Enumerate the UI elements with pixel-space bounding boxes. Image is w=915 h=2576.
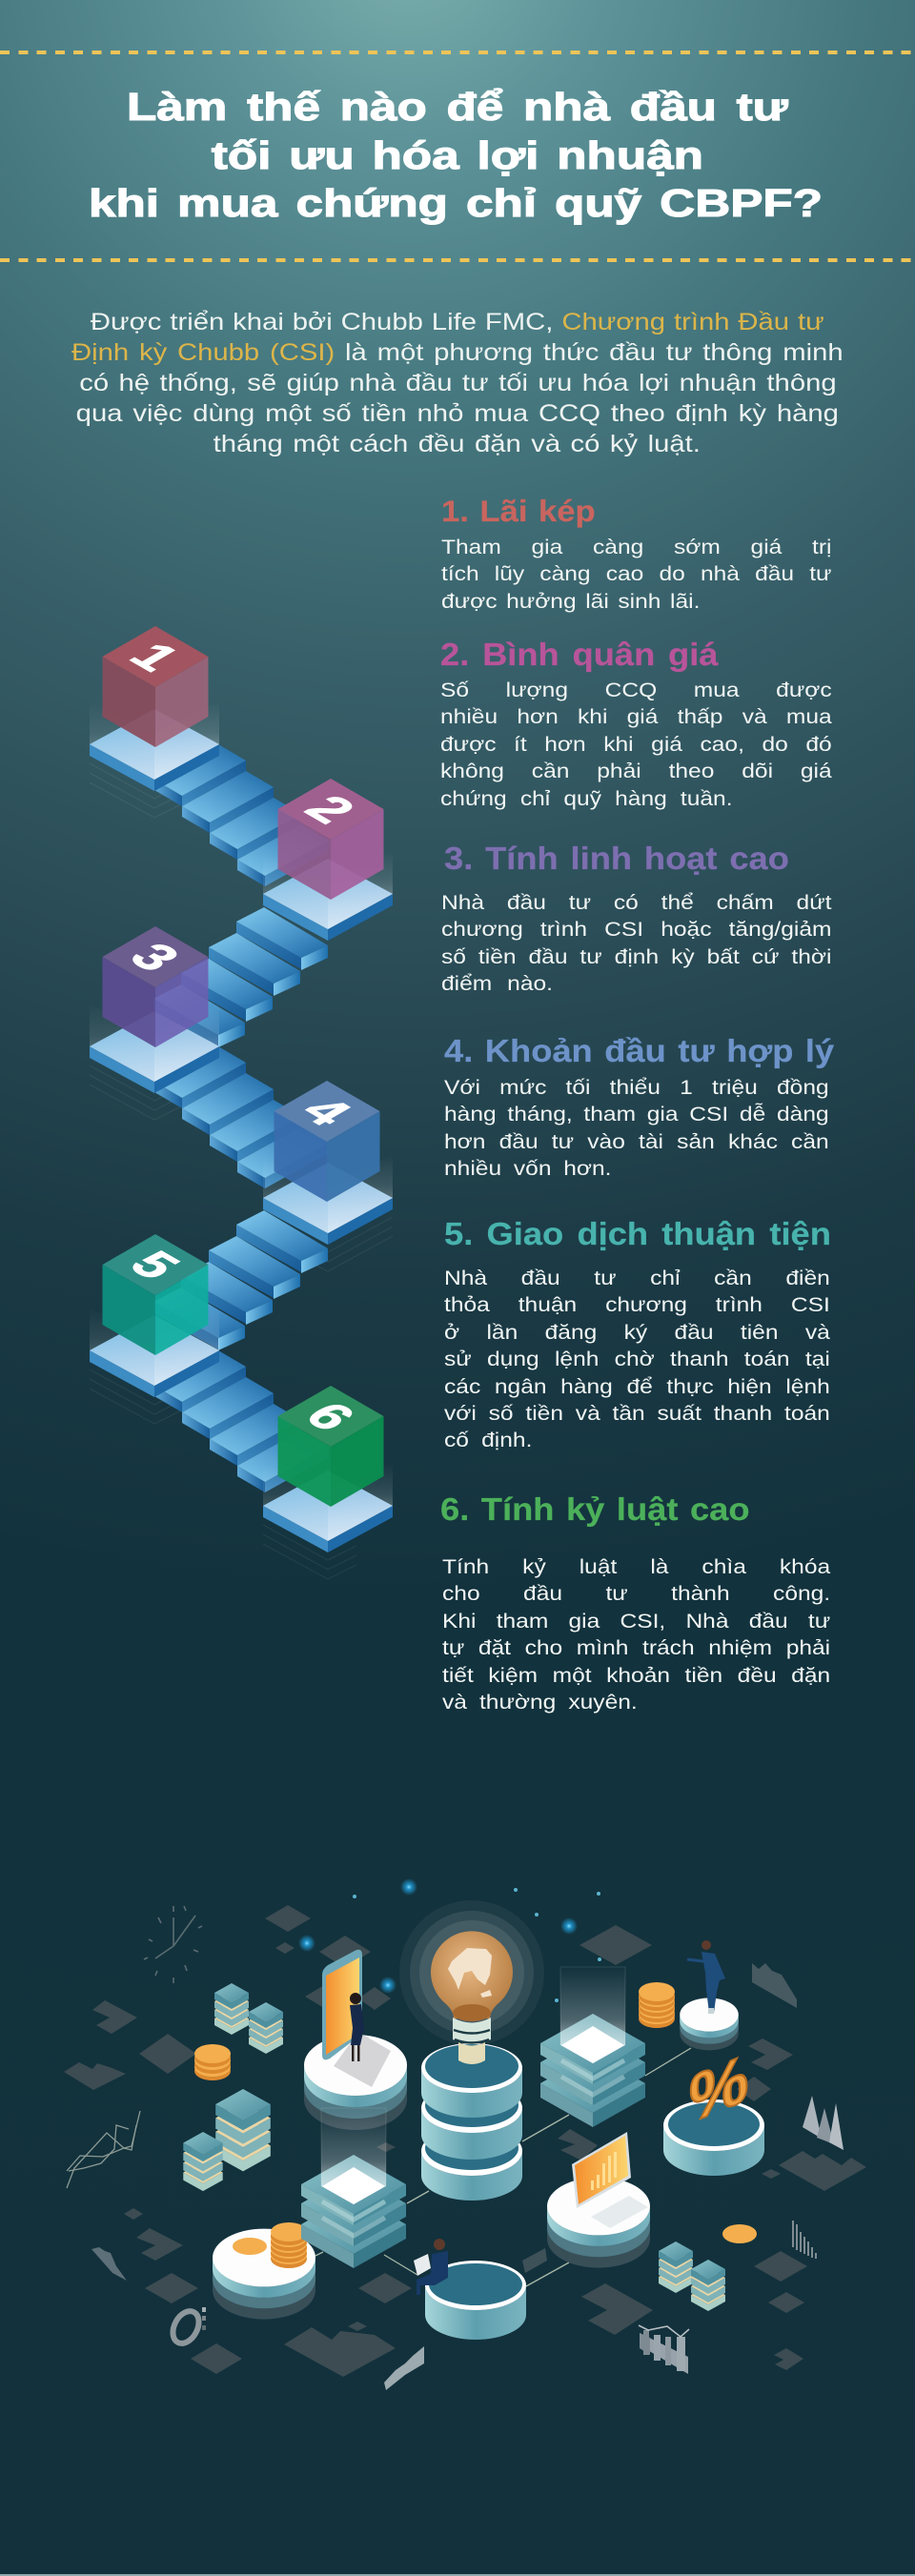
figure: standing man	[687, 1940, 725, 2014]
icon: white area chart	[384, 2346, 424, 2390]
intro paragraph: tháng một cách đều đặn và có kỷ luật.	[214, 431, 701, 457]
heading 4: 4. Khoản đầu tư hợp lý	[444, 1033, 834, 1068]
top dashed divider	[0, 51, 915, 54]
text block 3: số tiền đầu tư định kỳ bất cứ thời	[441, 946, 831, 968]
heading 1: 1. Lãi kép	[441, 494, 596, 528]
text block 2: không cần phải theo dõi giá	[440, 761, 832, 782]
cube 6: 6	[293, 1395, 367, 1438]
text block 5: thỏa thuận chương trình CSI	[444, 1294, 830, 1316]
illustration: small servers	[214, 1983, 283, 2054]
text block 5: cố định.	[444, 1430, 532, 1451]
illustration: background diamond tiles	[64, 1905, 866, 2377]
illustration: monitor pedestal	[547, 2132, 650, 2268]
figure: woman	[350, 1993, 364, 2061]
flight 4 to 5	[153, 1210, 328, 1350]
text block 5: ở lần đăng ký đầu tiên và	[444, 1322, 830, 1344]
cube 3: 3	[117, 936, 192, 979]
cube 4	[274, 1081, 379, 1202]
flight 1 to 2	[154, 744, 329, 886]
text block 2	[440, 679, 832, 810]
cube 1: 1	[117, 636, 192, 679]
illustration: coin stack right	[639, 1982, 675, 2028]
text block 5	[444, 1268, 830, 1451]
icon: spike chart	[92, 2247, 127, 2281]
text block 1: Tham gia càng sớm giá trị	[441, 537, 831, 558]
flight 3 to 4	[154, 1046, 329, 1188]
text block 1	[441, 537, 831, 613]
text block 5: Nhà đầu tư chỉ cần điền	[444, 1268, 830, 1289]
icon: glowing stars	[298, 1878, 601, 2002]
title: khi mua chứng chỉ quỹ CBPF?	[89, 181, 823, 225]
text block 2: nhiều hơn khi giá thấp và mua	[440, 706, 832, 728]
text block 4: hơn đầu tư vào tài sản khác cần	[444, 1131, 829, 1153]
illustration: coin single	[722, 2224, 757, 2243]
plates	[90, 701, 393, 1552]
text block 6: và thường xuyên.	[442, 1692, 638, 1714]
intro paragraph: qua việc dùng một số tiền nhỏ mua CCQ theo định kỳ hàng	[76, 400, 839, 427]
heading 3: 3. Tính linh hoạt cao	[444, 841, 789, 876]
title: Làm thế nào để nhà đầu tư	[127, 85, 788, 129]
text block 3: điểm nào.	[441, 973, 553, 995]
icon: line chart	[67, 2111, 140, 2188]
illustration: bottom right servers	[659, 2241, 725, 2311]
cube 2	[278, 779, 383, 900]
text block 6	[442, 1556, 831, 1714]
text block 2: được ít hơn khi giá cao, do đó	[440, 734, 832, 756]
figure: seated man	[414, 2239, 448, 2295]
cube 1	[103, 626, 208, 747]
cube 6	[278, 1386, 383, 1507]
heading 6: 6. Tính kỷ luật cao	[440, 1491, 749, 1527]
icon: grey mountain chart	[752, 1963, 797, 2008]
text block 6: Tính kỷ luật là chìa khóa	[442, 1556, 830, 1578]
icon: clock	[144, 1906, 202, 1983]
icon: smartphone	[322, 1950, 362, 2059]
text block 5: các ngân hàng để thực hiện lệnh	[444, 1376, 830, 1398]
icon: percent sign: %	[689, 2039, 748, 2138]
cube 2: 2	[293, 788, 367, 831]
text block 3	[441, 892, 831, 995]
cube 3	[103, 926, 208, 1047]
icon: monitor with chart	[572, 2132, 648, 2228]
illustration: coin stack left	[194, 2044, 231, 2080]
cube 5: 5	[117, 1244, 192, 1287]
bottom edge strip	[0, 2574, 915, 2576]
illustration: man with laptop on cylinder	[414, 2239, 526, 2340]
text block 6: tiết kiệm một khoản tiền đều đặn	[442, 1665, 830, 1687]
illustration: right data layers	[540, 1967, 645, 2127]
intro paragraph: Định kỳ Chubb (CSI) là một phương thức đầu tư thông minh	[71, 339, 844, 366]
flight 5 to 6	[154, 1350, 329, 1492]
illustration: left data layers	[301, 2108, 406, 2268]
flight 2 to 3	[153, 907, 328, 1047]
intro paragraph: Được triển khai bởi Chubb Life FMC, Chương trình Đầu tư	[91, 309, 824, 335]
text block 2: Số lượng CCQ mua được	[440, 679, 832, 701]
text block 2: chứng chỉ quỹ hàng tuần.	[440, 788, 733, 810]
text block 1: được hưởng lãi sinh lãi.	[441, 591, 700, 613]
intro paragraph: có hệ thống, sẽ giúp nhà đầu tư tối ưu hóa lợi nhuận thông	[79, 370, 837, 396]
text block 4: hàng tháng, tham gia CSI dễ dàng	[444, 1104, 829, 1126]
icon: light bulb globe	[399, 1900, 544, 2064]
icon: hatch chart	[522, 2248, 547, 2273]
text block 3: Nhà đầu tư có thể chấm dứt	[441, 892, 831, 914]
intro paragraph	[71, 309, 844, 457]
text block 4	[444, 1077, 829, 1180]
icon: bar chart with trend line	[639, 2325, 689, 2374]
text block 6: Khi tham gia CSI, Nhà đầu tư	[442, 1611, 830, 1633]
title: tối ưu hóa lợi nhuận	[212, 133, 703, 177]
staircase	[90, 701, 393, 1552]
text block 1: tích lũy càng cao do nhà đầu tư	[441, 563, 831, 585]
icon: donut chart	[168, 2306, 206, 2348]
cube 5	[103, 1234, 208, 1355]
title	[89, 85, 823, 225]
icon: small bars	[792, 2221, 817, 2259]
text block 6: tự đặt cho mình trách nhiệm phải	[442, 1637, 830, 1659]
illustration: database cylinders with bulb	[399, 1900, 544, 2201]
icon: triangles chart	[803, 2096, 844, 2150]
illustration: phone pedestal	[304, 1950, 407, 2130]
heading 5: 5. Giao dịch thuận tiện	[444, 1216, 831, 1251]
illustration: large servers	[183, 2089, 271, 2191]
text block 5: với số tiền và tần suất thanh toán	[444, 1403, 830, 1425]
illustration: coin pedestal	[213, 2222, 315, 2320]
text block 6: cho đầu tư thành công.	[442, 1583, 830, 1605]
text block 5: sử dụng lệnh chờ thanh toán tại	[444, 1349, 830, 1370]
bottom title dashed divider	[0, 258, 915, 262]
text block 4: Với mức tối thiểu 1 triệu đồng	[444, 1077, 829, 1099]
illustration: percent pedestal	[663, 2039, 764, 2176]
illustration: connector lines	[315, 2048, 691, 2286]
heading 2: 2. Bình quân giá	[440, 637, 719, 672]
cube 4: 4	[289, 1090, 363, 1133]
text block 3: chương trình CSI hoặc tăng/giảm	[441, 919, 831, 941]
text block 4: nhiều vốn hơn.	[444, 1158, 612, 1180]
illustration: man on pedestal	[680, 1940, 739, 2050]
